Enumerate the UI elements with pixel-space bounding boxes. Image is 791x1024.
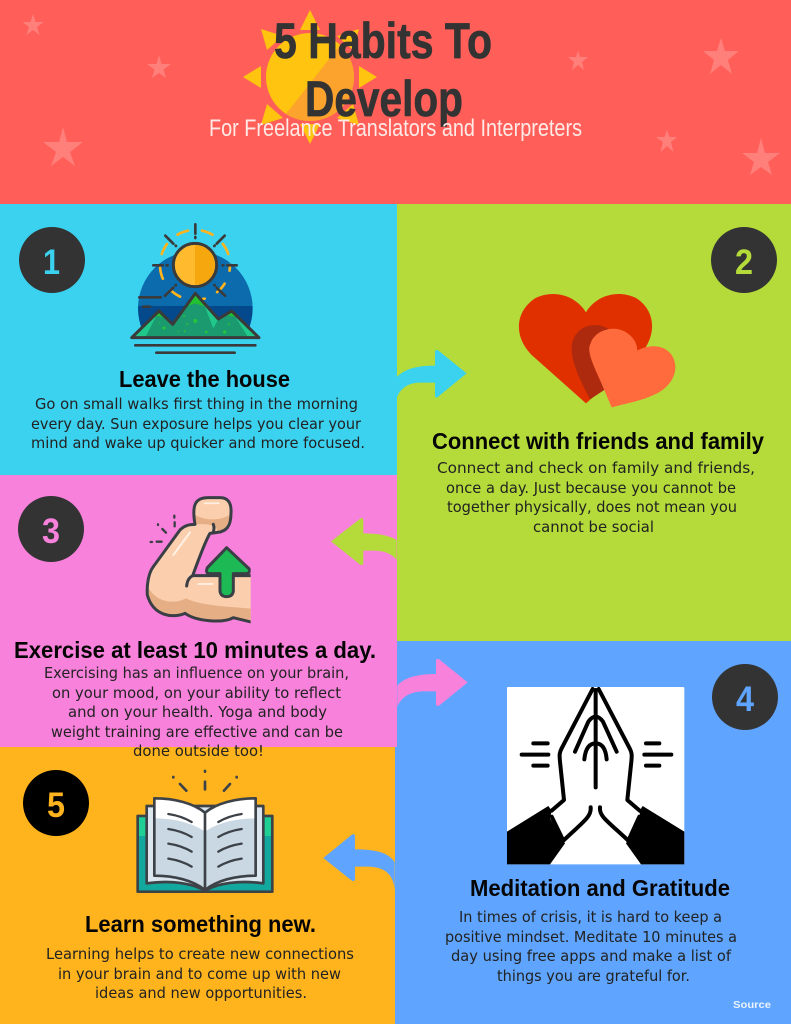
- body text: weight training are effective and can be: [51, 723, 343, 741]
- body text: In times of crisis, it is hard to keep a: [459, 908, 722, 926]
- body text: [46, 945, 354, 1002]
- header banner: [0, 0, 791, 204]
- icon: flexed arm with arrow: [147, 498, 255, 623]
- badge 2: [711, 227, 777, 293]
- body text: Learning helps to create new connections: [46, 945, 354, 963]
- badge 1: [19, 227, 85, 293]
- title: Develop: [305, 71, 463, 127]
- decorative stars: [22, 14, 780, 175]
- heading: Exercise at least 10 minutes a day.: [14, 637, 376, 663]
- body text: day using free apps and make a list of: [451, 947, 732, 965]
- badge 2: 2: [735, 243, 753, 282]
- heading: Connect with friends and family: [432, 428, 764, 454]
- badge 1: 1: [43, 243, 60, 282]
- panel: meditation and gratitude: [395, 641, 791, 1024]
- panel: learn something new: [0, 747, 395, 1024]
- body text: Go on small walks first thing in the morning: [35, 395, 358, 413]
- icon: sun over mountains: [132, 224, 259, 353]
- badge 5: 5: [47, 786, 65, 825]
- body text: [31, 395, 365, 452]
- panel: leave the house: [0, 204, 397, 475]
- title: [274, 13, 492, 127]
- body text: Exercising has an influence on your brain,: [44, 664, 349, 682]
- body text: and on your health. Yoga and body: [68, 703, 327, 721]
- badge 4: 4: [736, 680, 754, 719]
- badge 4: [712, 664, 778, 730]
- badge 3: [18, 496, 84, 562]
- icon: open book: [138, 771, 272, 892]
- body text: mind and wake up quicker and more focused.: [31, 434, 365, 452]
- arrow: step 1 to 2: [397, 350, 467, 398]
- title: 5 Habits To: [274, 13, 492, 69]
- source link: Source: [733, 999, 771, 1011]
- body text: on your mood, on your ability to reflect: [52, 684, 341, 702]
- body text: things you are grateful for.: [497, 967, 690, 985]
- body text: in your brain and to come up with new: [58, 965, 341, 983]
- badge 5: [23, 770, 89, 836]
- arrow: step 2 to 3: [331, 518, 397, 565]
- body text: every day. Sun exposure helps you clear your: [31, 415, 362, 433]
- icon: praying hands: [507, 687, 684, 864]
- arrow: step 3 to 4: [397, 659, 468, 707]
- body text: done outside too!: [133, 742, 264, 760]
- heading: Leave the house: [119, 366, 290, 392]
- panel: exercise: [0, 475, 397, 760]
- arrow: step 4 to 5: [323, 834, 395, 890]
- body text: [445, 908, 737, 985]
- body text: [44, 664, 349, 760]
- panel: connect with friends and family: [397, 204, 791, 641]
- heading: Meditation and Gratitude: [470, 875, 730, 901]
- subtitle: For Freelance Translators and Interpreters: [209, 115, 582, 142]
- body text: cannot be social: [533, 518, 654, 536]
- body text: together physically, does not mean you: [447, 498, 737, 516]
- icon: hearts: [519, 294, 675, 407]
- body text: once a day. Just because you cannot be: [446, 479, 736, 497]
- badge 3: 3: [42, 512, 60, 551]
- icon: sun: [243, 10, 377, 144]
- body text: [437, 459, 755, 536]
- body text: positive mindset. Meditate 10 minutes a: [445, 928, 737, 946]
- heading: Learn something new.: [85, 911, 316, 937]
- body text: Connect and check on family and friends,: [437, 459, 755, 477]
- body text: ideas and new opportunities.: [95, 984, 307, 1002]
